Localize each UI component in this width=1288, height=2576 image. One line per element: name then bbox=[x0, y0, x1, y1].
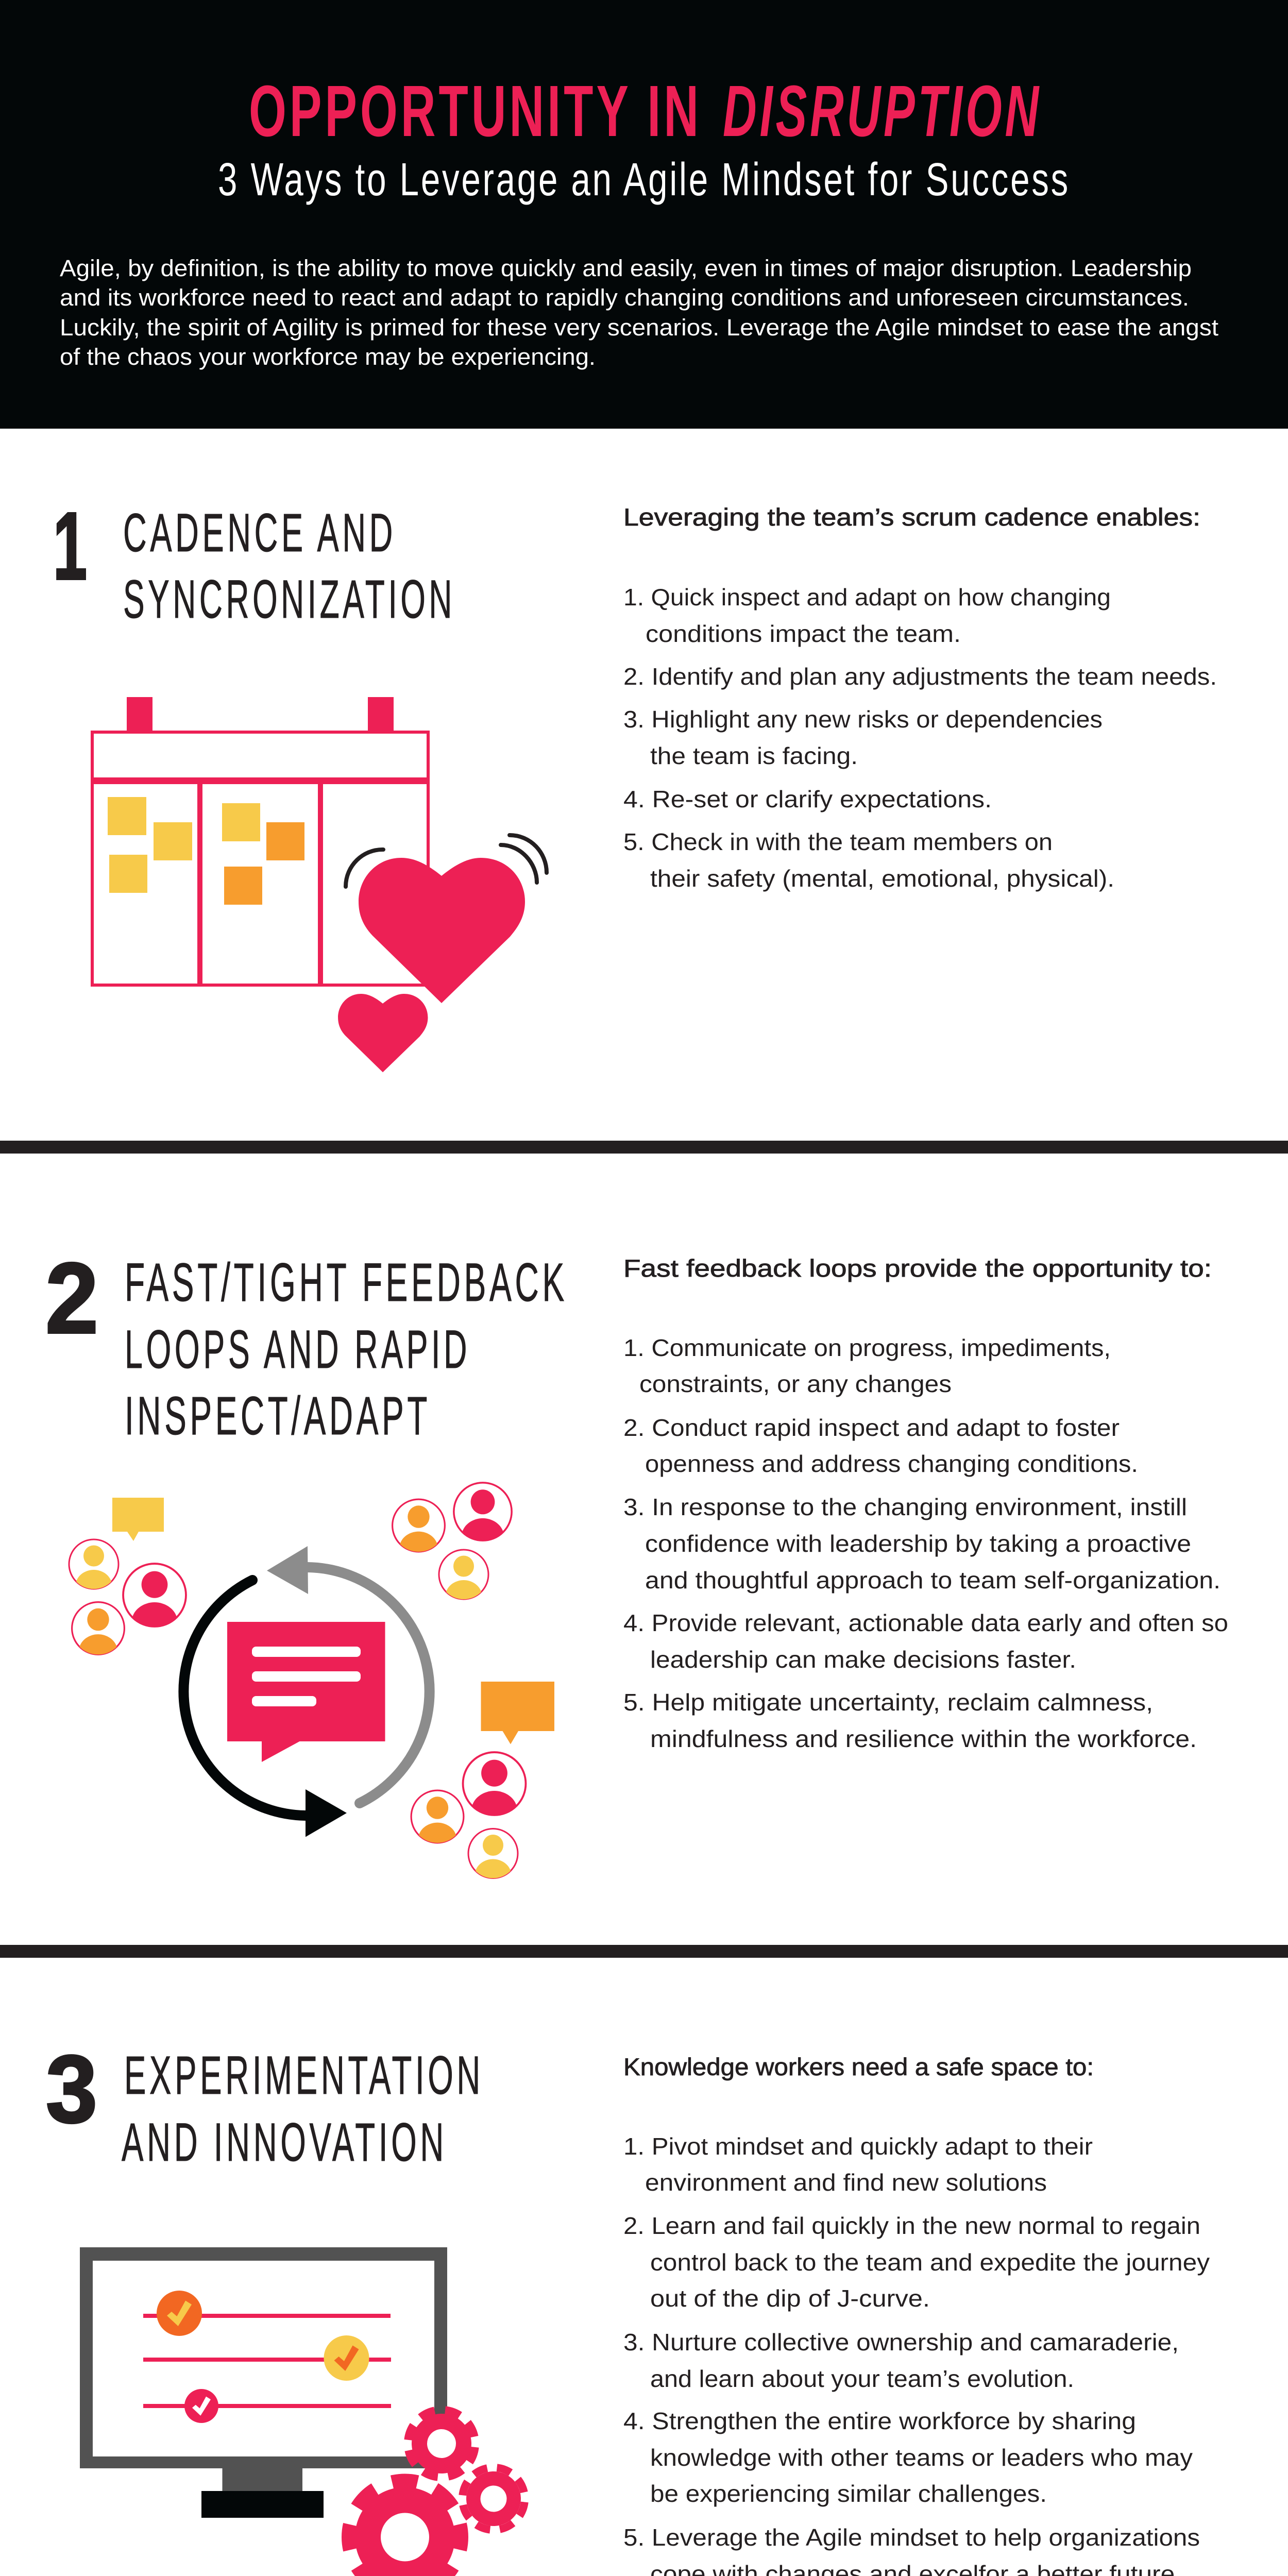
icon: scrum board calendar with hearts bbox=[91, 697, 547, 1072]
small heart bbox=[338, 994, 428, 1072]
list section 3: 3. Nurture collective ownership and camaraderie, bbox=[623, 2329, 1179, 2355]
heading: cadence and syncronization: CADENCE AND bbox=[123, 503, 396, 563]
list section 1: the team is facing. bbox=[650, 742, 858, 769]
number 1: 1 bbox=[53, 493, 87, 600]
list section 1: 1. Quick inspect and adapt on how changing bbox=[623, 584, 1111, 611]
number 3: 3 bbox=[46, 2036, 97, 2143]
medium gear bbox=[399, 2401, 484, 2486]
subheading section 2: Fast feedback loops provide the opportunity to: bbox=[623, 1255, 1212, 1282]
list section 3: out of the dip of J-curve. bbox=[650, 2285, 930, 2312]
avatars left group bbox=[69, 1539, 186, 1655]
list section 2: 1. Communicate on progress, impediments, bbox=[623, 1334, 1111, 1361]
panel: section 2 feedback loops bbox=[45, 1242, 1228, 1878]
list section 1: 2. Identify and plan any adjustments the team needs. bbox=[623, 663, 1217, 690]
heading: experimentation and innovation bbox=[122, 2045, 484, 2173]
icon: monitor with checklist and gears bbox=[80, 2247, 534, 2576]
list section 1: 3. Highlight any new risks or dependencies bbox=[623, 706, 1103, 733]
icon: feedback loop with teams bbox=[69, 1483, 554, 1878]
monitor bbox=[80, 2247, 447, 2518]
subheading section 3: Knowledge workers need a safe space to: bbox=[623, 2053, 1094, 2080]
heading: cadence and syncronization bbox=[123, 503, 455, 630]
list section 3: knowledge with other teams or leaders who may bbox=[650, 2444, 1193, 2471]
panel: section 1 cadence and syncronization bbox=[53, 493, 1217, 1072]
large heart bbox=[359, 858, 525, 1003]
heading: cadence and syncronization: SYNCRONIZATION bbox=[123, 569, 455, 630]
grey loop arrow bbox=[267, 1546, 430, 1803]
intro text block: Luckily, the spirit of Agility is primed for these very scenarios. Leverage the Agile mindset to ease the angst bbox=[60, 314, 1219, 341]
heading: experimentation and innovation: EXPERIMENTATION bbox=[124, 2045, 484, 2106]
list section 1: conditions impact the team. bbox=[646, 620, 961, 647]
list section 2: 4. Provide relevant, actionable data early and often so bbox=[623, 1609, 1228, 1636]
list section 1: 4. Re-set or clarify expectations. bbox=[623, 786, 992, 812]
heading: experimentation and innovation: AND INNOVATION bbox=[122, 2112, 447, 2173]
yellow speech bubble bbox=[112, 1498, 164, 1541]
list section 2: 3. In response to the changing environment, instill bbox=[623, 1494, 1187, 1520]
large gear bbox=[349, 2481, 461, 2576]
list section 2: and thoughtful approach to team self-organization. bbox=[645, 1567, 1221, 1594]
list section 3: be experiencing similar challenges. bbox=[650, 2480, 1047, 2507]
central message bubble bbox=[227, 1622, 385, 1762]
list section 3: 2. Learn and fail quickly in the new normal to regain bbox=[623, 2212, 1200, 2239]
list section 1: 5. Check in with the team members on bbox=[623, 828, 1053, 855]
list section 2 bbox=[623, 1334, 1228, 1752]
intro text block bbox=[60, 255, 1219, 370]
heading: fast tight feedback loops: INSPECT/ADAPT bbox=[125, 1386, 431, 1446]
panel: section 3 experimentation bbox=[46, 2036, 1210, 2576]
list section 2: 5. Help mitigate uncertainty, reclaim calmness, bbox=[623, 1689, 1153, 1716]
checklist sliders bbox=[143, 2291, 391, 2423]
intro text block: and its workforce need to react and adapt to rapidly changing conditions and unforeseen circumstances. bbox=[60, 284, 1189, 311]
list section 2: openness and address changing conditions. bbox=[645, 1450, 1138, 1477]
list section 3: and learn about your team’s evolution. bbox=[650, 2365, 1074, 2392]
list section 2: mindfulness and resilience within the workforce. bbox=[650, 1725, 1197, 1752]
small gear bbox=[453, 2459, 534, 2539]
orange speech bubble bbox=[481, 1682, 554, 1744]
list section 2: leadership can make decisions faster. bbox=[650, 1646, 1076, 1673]
heading: fast tight feedback loops bbox=[125, 1252, 568, 1446]
title: DISRUPTION bbox=[723, 70, 1042, 151]
heart beat arcs bbox=[346, 835, 547, 887]
number 2: 2 bbox=[45, 1242, 98, 1354]
intro text block: Agile, by definition, is the ability to move quickly and easily, even in times of major disruption. Leadership bbox=[60, 255, 1192, 281]
intro text block: of the chaos your workforce may be experiencing. bbox=[60, 344, 596, 370]
list section 1 bbox=[623, 584, 1217, 892]
list section 1: their safety (mental, emotional, physical). bbox=[650, 865, 1114, 892]
heading: fast tight feedback loops: LOOPS AND RAPID bbox=[125, 1319, 470, 1380]
avatars bottom right group bbox=[411, 1752, 526, 1878]
sticky notes bbox=[108, 797, 304, 905]
list section 2: constraints, or any changes bbox=[639, 1370, 952, 1397]
avatars top right group bbox=[393, 1483, 512, 1599]
list section 2: 2. Conduct rapid inspect and adapt to foster bbox=[623, 1414, 1120, 1441]
black loop arrow bbox=[183, 1580, 347, 1837]
heading: fast tight feedback loops: FAST/TIGHT FEEDBACK bbox=[125, 1252, 568, 1313]
list section 2: confidence with leadership by taking a proactive bbox=[645, 1530, 1191, 1557]
title: OPPORTUNITY IN bbox=[249, 70, 702, 151]
panel: header bbox=[0, 0, 1288, 429]
list section 3: control back to the team and expedite the journey bbox=[650, 2249, 1210, 2276]
list section 3: 1. Pivot mindset and quickly adapt to their bbox=[623, 2133, 1093, 2160]
list section 3: 4. Strengthen the entire workforce by sharing bbox=[623, 2408, 1136, 2434]
subheading section 1: Leveraging the team’s scrum cadence enables: bbox=[623, 503, 1200, 531]
list section 3 bbox=[623, 2133, 1210, 2576]
list section 3: 5. Leverage the Agile mindset to help organizations bbox=[623, 2524, 1200, 2551]
calendar board bbox=[91, 697, 430, 987]
list section 3: environment and find new solutions bbox=[645, 2169, 1047, 2196]
